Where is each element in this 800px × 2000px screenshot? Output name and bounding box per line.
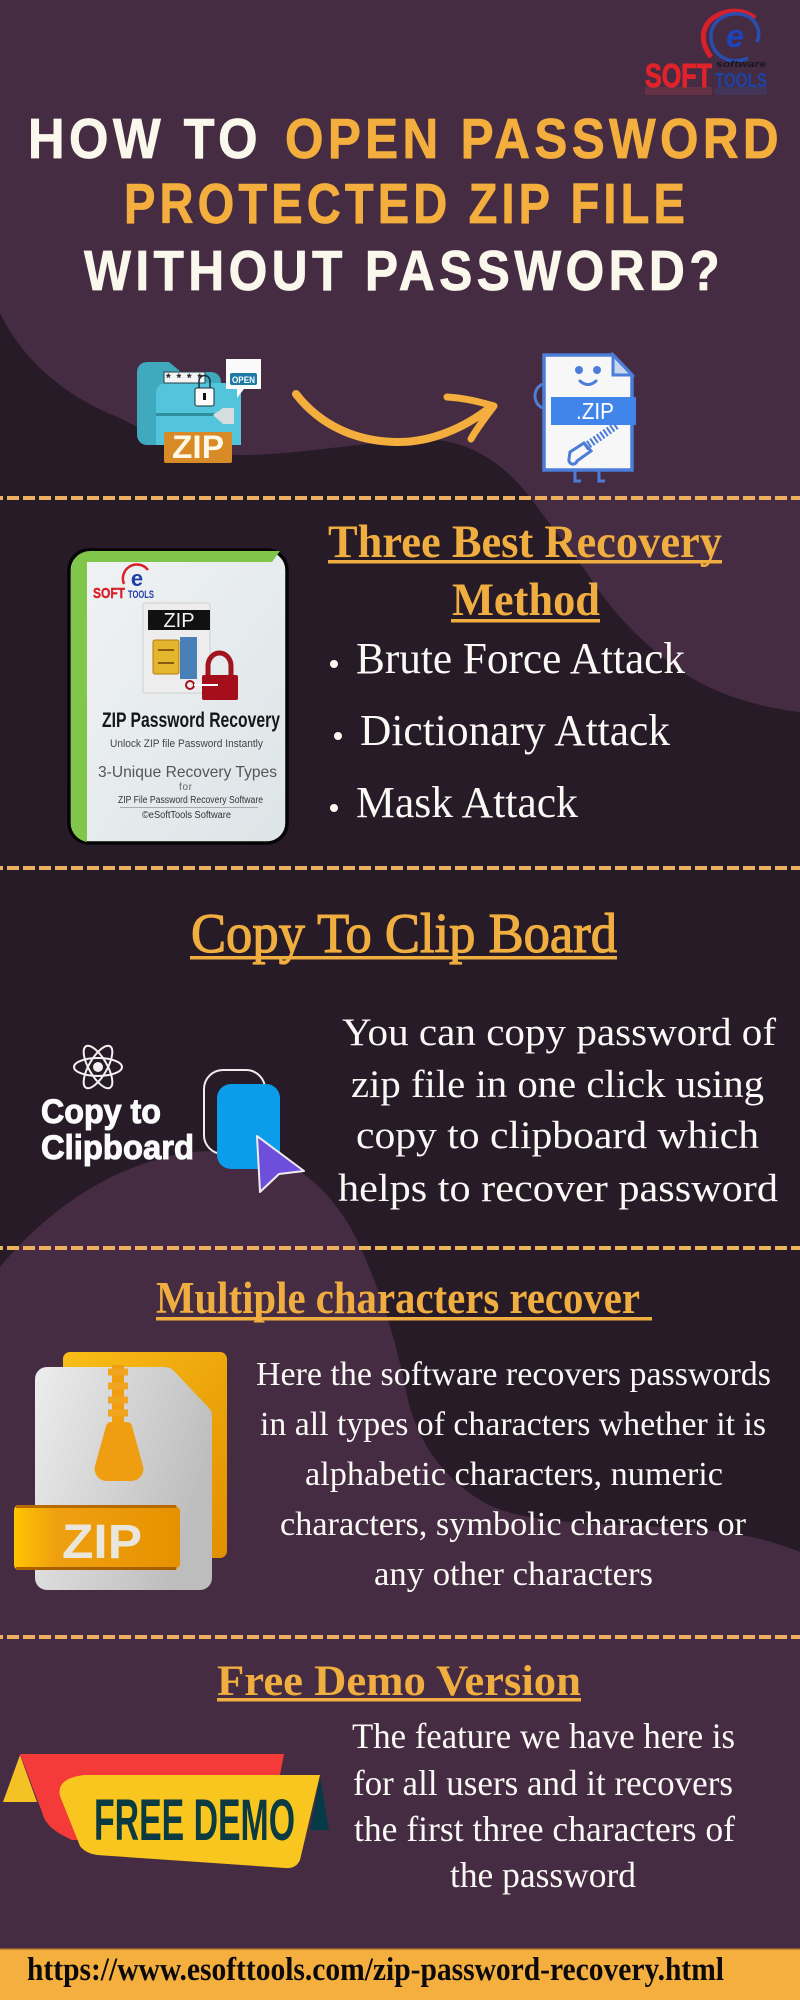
product box image <box>69 550 287 843</box>
text: multiple characters description: Here the software recovers passwords <box>256 1356 771 1393</box>
text: multiple characters description: in all types of characters whether it is <box>260 1406 766 1443</box>
title <box>28 107 783 303</box>
text: multiple characters description: any other characters <box>374 1556 653 1593</box>
product box image: for <box>179 782 193 793</box>
text: multiple characters description: alphabetic characters, numeric <box>305 1456 723 1493</box>
text: copy description: zip file in one click using <box>351 1063 764 1106</box>
icon: zip file 3d <box>14 1352 227 1590</box>
logo: eSoftTools: e <box>726 18 744 54</box>
heading: free demo version: Free Demo Version <box>217 1658 581 1705</box>
label: copy to clipboard <box>41 1093 194 1167</box>
logo: eSoftTools: software <box>716 59 766 69</box>
heading: multiple characters recover: Multiple characters recover <box>156 1273 640 1323</box>
list: recovery methods <box>330 634 685 827</box>
text: copy description: copy to clipboard which <box>356 1114 759 1157</box>
icon: locked zip folder: OPEN <box>232 375 255 385</box>
product box image: ©eSoftTools Software <box>142 810 231 821</box>
text: copy description <box>338 1011 779 1210</box>
list: recovery methods: Dictionary Attack <box>360 706 670 755</box>
logo: eSoftTools: TOOLS <box>715 70 767 92</box>
icon: locked zip folder: ZIP <box>172 429 224 465</box>
label: copy to clipboard: Copy to <box>41 1093 161 1131</box>
product box image: 3-Unique Recovery Types <box>98 764 277 781</box>
icon: happy zip file: .ZIP <box>576 398 614 424</box>
icon: atom <box>74 1042 122 1092</box>
text: multiple characters description <box>256 1356 771 1593</box>
icon: clipboard with cursor <box>204 1070 304 1192</box>
divider <box>0 1246 800 1250</box>
text: copy description: helps to recover password <box>338 1167 779 1210</box>
text: free demo description: the password <box>450 1855 636 1895</box>
product box image: TOOLS <box>128 589 154 601</box>
divider <box>0 496 800 500</box>
text: multiple characters description: characters, symbolic characters or <box>280 1506 747 1543</box>
text: copy description: You can copy password of <box>342 1011 776 1054</box>
text: free demo description <box>352 1716 735 1895</box>
heading: three best recovery method: Method <box>452 574 600 626</box>
text: free demo description: the first three characters of <box>354 1809 735 1849</box>
icon: locked zip folder <box>137 359 261 465</box>
product box image: ZIP <box>163 610 195 632</box>
product box image: Unlock ZIP file Password Instantly <box>110 738 263 750</box>
product box image: ZIP Password Recovery <box>102 709 280 732</box>
badge: free demo: FREE DEMO <box>94 1788 295 1853</box>
heading: three best recovery method: Three Best Recovery <box>328 516 722 568</box>
footer bar: https://www.esofttools.com/zip-password-recovery.html <box>27 1952 724 1988</box>
heading: three best recovery method <box>328 516 722 626</box>
label: copy to clipboard: Clipboard <box>41 1129 194 1167</box>
icon: locked zip folder: **** <box>166 371 202 385</box>
title: PROTECTED ZIP FILE <box>124 172 689 236</box>
logo: eSoftTools: SOFT <box>645 57 712 94</box>
divider <box>0 866 800 870</box>
divider <box>0 1635 800 1639</box>
icon: happy zip file <box>535 355 636 481</box>
icon: zip file 3d: ZIP <box>62 1516 142 1569</box>
product box image: e <box>131 566 143 591</box>
footer bar <box>0 1948 800 2000</box>
list: recovery methods: Mask Attack <box>356 778 578 827</box>
product box image: ZIP File Password Recovery Software <box>118 795 263 806</box>
heading: copy to clip board: Copy To Clip Board <box>191 903 617 965</box>
arrow <box>296 394 494 442</box>
text: free demo description: for all users and it recovers <box>353 1763 733 1803</box>
text: free demo description: The feature we have here is <box>352 1716 735 1756</box>
logo: eSoftTools <box>645 11 767 95</box>
title: WITHOUT PASSWORD? <box>84 239 724 303</box>
title: HOW TO <box>28 107 262 171</box>
list: recovery methods: Brute Force Attack <box>356 634 685 683</box>
product box image: SOFT <box>93 585 125 602</box>
badge: free demo <box>3 1754 329 1868</box>
